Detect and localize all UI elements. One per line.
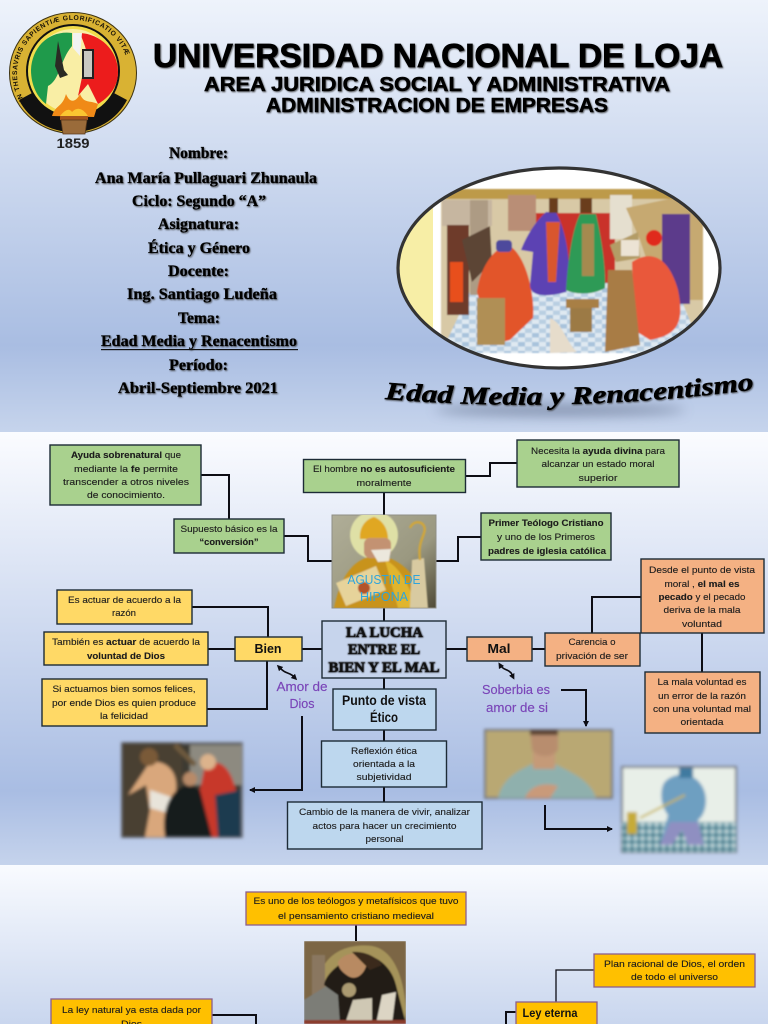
box: plan racional: de todo el universo	[631, 972, 718, 982]
box: plan racional	[594, 954, 755, 987]
box: ley eterna	[516, 1002, 597, 1024]
box: mala voluntad: orientada	[680, 717, 724, 727]
box: punto de vista ético: Punto de vista	[342, 693, 426, 708]
text block: student data: Abril-Septiembre 2021	[118, 380, 278, 397]
box: conversión	[174, 519, 284, 553]
box: felicidad: Si actuamos bien somos felices,	[52, 684, 196, 694]
box: cambio: Cambio de la manera de vivir, analizar	[299, 807, 470, 817]
box: ayuda sobrenatural: mediante la fe permite	[74, 464, 178, 474]
box: plan racional: Plan racional de Dios, el orden	[604, 959, 745, 969]
arrow: Soberbia to image	[561, 690, 586, 726]
arrow: Mal to Soberbia	[500, 665, 513, 677]
box: teólogo: el pensamiento cristiano medieval	[278, 911, 434, 921]
box: reflexión: orientada a la	[353, 759, 416, 769]
central title box: LA LUCHA	[346, 625, 424, 641]
text block: student data: Período:	[169, 357, 228, 374]
box: felicidad	[42, 679, 207, 726]
box: carencia	[545, 633, 640, 666]
text block: student data	[95, 145, 317, 397]
central title box: BIEN Y EL MAL	[328, 660, 440, 676]
box: Mal	[467, 637, 532, 661]
text block: student data: Ing. Santiago Ludeña	[127, 286, 277, 303]
box: conversión: Supuesto básico es la	[180, 524, 278, 534]
box: no autosuficiente: moralmente	[356, 478, 412, 488]
box: cambio	[288, 802, 482, 849]
box: mal es pecado: deriva de la mala	[664, 605, 741, 615]
central title box: LA LUCHA	[346, 625, 424, 641]
box: ley natural: La ley natural ya esta dada por	[62, 1005, 201, 1015]
box: ayuda sobrenatural	[50, 445, 201, 505]
box: punto de vista ético: Ético	[370, 710, 398, 725]
box: mal es pecado: pecado y el pecado	[658, 592, 746, 602]
central title box: ENTRE EL	[348, 642, 420, 658]
box: Bien: Bien	[254, 642, 282, 656]
box: cambio: actos para hacer un crecimiento	[312, 821, 456, 831]
arrow: Bien to Amor de Dios	[279, 667, 295, 678]
box: actuar razón: razón	[112, 608, 136, 618]
box: primer teólogo	[481, 513, 611, 560]
portrait: Agustín de Hipona: AGUSTIN DE	[348, 573, 420, 587]
box: mal es pecado	[641, 559, 764, 633]
label: Amor de Dios	[276, 679, 328, 711]
connectors	[192, 463, 702, 802]
arrow: Amor de Dios to painting	[250, 716, 302, 790]
central title box: BIEN Y EL MAL	[328, 660, 440, 676]
box: reflexión: Reflexión ética	[351, 746, 418, 756]
box: punto de vista ético	[333, 689, 436, 730]
illustration: medieval scholars oval	[398, 168, 720, 368]
image: proud man	[485, 730, 612, 798]
subtitle: area: AREA JURIDICA SOCIAL Y ADMINISTRATIVA	[204, 74, 670, 96]
box: ayuda divina: alcanzar un estado moral	[542, 459, 654, 469]
label: Amor de Dios: Dios	[290, 696, 315, 711]
box: ayuda sobrenatural: de conocimiento.	[87, 490, 165, 500]
box: teólogo	[246, 892, 466, 925]
seal year: 1859	[56, 135, 90, 151]
title: UNIVERSIDAD NACIONAL DE LOJA	[153, 37, 723, 74]
box: mala voluntad: La mala voluntad es	[658, 677, 747, 687]
box: teólogo: Es uno de los teólogos y metafísicos que tuvo	[254, 896, 458, 906]
box: carencia: Carencia o	[568, 637, 616, 647]
box: conversión: “conversión”	[200, 537, 258, 547]
label: Soberbia: Soberbia es	[482, 682, 550, 697]
wordart shadow	[435, 404, 685, 416]
box: actuar razón: Es actuar de acuerdo a la	[68, 595, 182, 605]
box: mal es pecado: Desde el punto de vista	[649, 565, 756, 575]
box: reflexión: subjetividad	[356, 772, 412, 782]
box: ley natural	[51, 999, 212, 1024]
label: Soberbia: amor de si	[486, 700, 548, 715]
text block: student data: Docente:	[168, 263, 229, 280]
portrait: Agustín de Hipona: HIPONA	[360, 590, 409, 604]
box: felicidad: por ende Dios es quien produce	[52, 698, 196, 708]
box: voluntad de Dios: voluntad de Dios	[87, 651, 165, 661]
portrait: Tomás de Aquino	[304, 941, 406, 1024]
painting: Cristo y santos	[122, 743, 242, 837]
box: mala voluntad	[645, 672, 760, 733]
box: primer teólogo: padres de iglesia católica	[488, 546, 607, 556]
box: mal es pecado: voluntad	[682, 619, 722, 629]
text block: student data: Ética y Género	[148, 238, 250, 257]
connectors	[212, 925, 594, 1024]
text block: student data: Asignatura:	[158, 216, 239, 233]
panel: Tomás de Aquino	[0, 865, 768, 1024]
box: mal es pecado: moral , el mal es	[664, 579, 740, 589]
box: carencia: privación de ser	[556, 651, 628, 661]
wordart: Edad Media y Renacentismo: Edad Media y Renacentismo	[384, 378, 754, 412]
box: reflexión	[322, 741, 446, 787]
image: giant with pitchfork	[622, 767, 736, 852]
box: cambio: personal	[366, 834, 404, 844]
box: ayuda divina: Necesita la ayuda divina para	[531, 446, 666, 456]
box: ayuda divina: superior	[578, 473, 618, 483]
box: actuar razón	[57, 590, 192, 624]
central title box	[322, 621, 446, 678]
arrow: proud man to blue figure	[545, 805, 612, 829]
icon: university seal	[9, 12, 137, 134]
box: Mal: Mal	[488, 642, 510, 656]
text block: student data: Ciclo: Segundo “A”	[132, 193, 266, 210]
box: mala voluntad: con una voluntad mal	[653, 704, 751, 714]
box: no autosuficiente	[304, 460, 466, 492]
box: no autosuficiente: El hombre no es autosuficiente	[313, 464, 455, 474]
box: voluntad de Dios: También es actuar de acuerdo la	[52, 637, 201, 647]
box: ayuda sobrenatural: Ayuda sobrenatural que	[71, 450, 181, 460]
text block: student data: Nombre:	[169, 145, 228, 162]
panel: Agustín de Hipona	[0, 432, 768, 865]
box: voluntad de Dios	[44, 632, 208, 665]
box: felicidad: la felicidad	[100, 711, 148, 721]
box: mala voluntad: un error de la razón	[658, 691, 746, 701]
central title box: ENTRE EL	[348, 642, 420, 658]
panel: portada	[0, 0, 768, 432]
label: Amor de Dios: Amor de	[276, 679, 328, 694]
box: Bien	[235, 637, 302, 661]
box: primer teólogo: y uno de los Primeros	[497, 532, 595, 542]
box: ayuda divina	[517, 440, 679, 487]
icon: university seal: IN THESAVRIS SAPIENTIÆ GLORIFICATIO VITÆ	[12, 15, 130, 102]
label: Soberbia	[482, 682, 550, 715]
subtitle: career: ADMINISTRACION DE EMPRESAS	[266, 95, 608, 117]
text block: student data: Ana María Pullaguari Zhunaula	[95, 170, 317, 187]
box: primer teólogo: Primer Teólogo Cristiano	[488, 518, 604, 528]
box: ley eterna: Ley eterna	[522, 1008, 578, 1020]
text block: student data: Edad Media y Renacentismo	[101, 333, 297, 350]
portrait: Agustín de Hipona	[332, 511, 436, 608]
text block: student data: Tema:	[178, 310, 220, 327]
box: ayuda sobrenatural: transcender a otros niveles	[63, 477, 189, 487]
